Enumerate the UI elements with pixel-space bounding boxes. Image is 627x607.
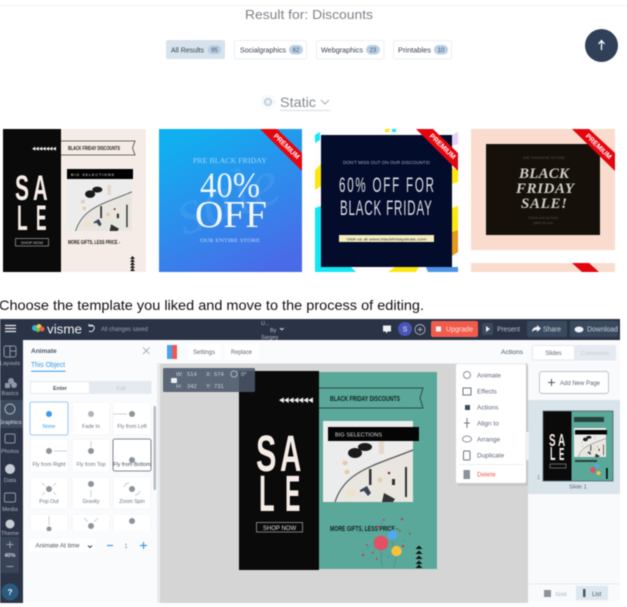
option: fade in: Fade In: [82, 424, 100, 430]
sale lettering: [256, 425, 301, 523]
premium ribbon: [260, 129, 302, 171]
design on canvas: ◀◀◀◀◀◀◀: [279, 396, 314, 404]
template card: 40% off: sale: [164, 145, 289, 250]
transform info box: 0°: [241, 372, 247, 378]
sidebar: theme: [1, 520, 19, 537]
transform info box: [163, 368, 255, 392]
tab: this object: This Object: [31, 362, 65, 369]
actions context menu: [456, 364, 528, 486]
transform info box: 574: [214, 372, 224, 378]
shop now button: [16, 238, 48, 246]
slide 1 thumbnail: L: [550, 445, 556, 465]
sidebar: layouts: Layouts: [0, 361, 20, 367]
help button: ?: [7, 587, 13, 597]
colour swatch: [167, 345, 177, 359]
slide 1 thumbnail: Slide 1: [569, 484, 587, 490]
design on canvas: [239, 371, 437, 570]
slide 1 thumbnail: E: [559, 443, 564, 464]
website strip: [339, 235, 434, 242]
transform info box: 342: [187, 384, 197, 390]
panel title: [31, 348, 150, 355]
help button: [2, 584, 18, 600]
menu: delete: Delete: [477, 472, 496, 478]
option: zoom spin: Zoom Spin: [119, 499, 145, 505]
menu: actions: Actions: [477, 404, 499, 412]
settings button: Settings: [193, 349, 216, 356]
left sidebar: [0, 340, 23, 603]
project title: U...: [261, 321, 270, 327]
icon: chat: [383, 326, 391, 334]
slide 1 thumbnail: S: [549, 431, 556, 451]
top bar: [0, 319, 620, 341]
ribbon headline: [319, 388, 423, 408]
sale lettering: S: [256, 425, 276, 482]
template card: 60% off: 60% OFF FOR: [339, 173, 434, 197]
menu: animate: Animate: [477, 372, 501, 380]
transform info box: H:: [176, 384, 182, 390]
pill: webgraphics: 23: [370, 48, 377, 54]
tabs: slides comments: Comments: [581, 351, 609, 357]
sidebar: basics: Basics: [1, 391, 19, 397]
avatar: [398, 322, 412, 336]
option: fly from right: Fly from Right: [33, 462, 66, 468]
icon: static: [262, 96, 274, 108]
add new page button: Add New Page: [560, 380, 600, 387]
add collaborator: [415, 324, 425, 334]
ribbon headline: BLACK FRIDAY DISCOUNTS: [68, 146, 120, 152]
tabs: slides comments: Slides: [545, 351, 562, 357]
visme logo: visme: [47, 322, 82, 336]
template card: 60% off: DON'T MISS OUT ON OUR DISCOUNTS!: [343, 160, 430, 165]
editor screenshot: [0, 319, 620, 603]
sale lettering: S: [15, 170, 29, 208]
download button: [570, 321, 618, 337]
pill: printables: Printables: [398, 46, 431, 54]
template card: 40% off: [159, 129, 302, 272]
add new page button: [540, 372, 608, 394]
template card: 60% off: BLACK FRIDAY: [340, 196, 432, 220]
premium ribbon: PREMIUM: [272, 133, 300, 161]
pill: printables: 10: [438, 48, 445, 54]
pill: socialgraphics: Socialgraphics: [240, 46, 286, 54]
pill: socialgraphics: 62: [293, 48, 300, 54]
premium ribbon: PREMIUM: [584, 133, 612, 161]
template card: 40% off: 40%: [200, 165, 260, 205]
top bar: All changes saved: [101, 326, 148, 333]
animate timing control: [30, 539, 147, 552]
option: none: None: [43, 424, 55, 430]
heading: result for discounts: Result for: Discounts: [245, 7, 374, 22]
option: fly from bottom: Fly from Bottom: [113, 462, 151, 468]
premium ribbon: [572, 129, 615, 171]
top divider: [0, 5, 627, 6]
project title: By: [270, 328, 277, 334]
shop now button: SHOP NOW: [263, 526, 296, 532]
template card: black friday sale italic: [471, 129, 615, 250]
shop now button: SHOP NOW: [21, 240, 43, 245]
transform info box: 514: [187, 372, 197, 378]
static dropdown: Static: [280, 94, 316, 110]
filter pills: [166, 40, 452, 59]
premium ribbon: PREMIUM: [428, 133, 456, 161]
enter exit toggle: [30, 381, 152, 394]
template card: cropped next row: [471, 263, 615, 272]
transform info box: 731: [214, 384, 224, 390]
options row cut off: [28, 514, 154, 534]
upgrade button: Upgrade: [446, 326, 473, 334]
sale lettering: A: [33, 169, 48, 209]
ribbon headline: BLACK FRIDAY DISCOUNTS: [330, 394, 400, 403]
pill: socialgraphics: [234, 40, 306, 59]
collapse handle: [525, 432, 529, 460]
sale lettering: E: [285, 466, 300, 523]
pill: all results: [166, 40, 225, 59]
right slides panel: [525, 340, 620, 603]
template card: black friday sale italic: BLACK: [518, 166, 570, 182]
slide 1 thumbnail: [528, 400, 620, 494]
template card: 40% off: OUR ENTIRE STORE: [200, 238, 261, 244]
replace button: [225, 344, 259, 360]
upgrade button: [431, 321, 478, 337]
template card: 40% off: PRE BLACK FRIDAY: [193, 156, 268, 165]
menu: duplicate: Duplicate: [477, 452, 504, 460]
editor toolbar: Actions: [501, 349, 524, 356]
sidebar: media: [2, 493, 19, 513]
sidebar: basics: [1, 378, 19, 397]
menu: effects: Effects: [477, 388, 498, 396]
tabs: slides comments: [532, 345, 616, 360]
photo block: [323, 421, 419, 502]
animate timing control: Animate At time: [36, 542, 80, 550]
enter exit toggle: Exit: [116, 386, 126, 392]
grid list view switch: Grid: [556, 592, 566, 598]
slide 1 thumbnail: A: [558, 431, 565, 451]
option: pop out: Pop Out: [39, 499, 59, 505]
pill: printables: [394, 40, 452, 59]
sidebar: theme: Theme: [1, 531, 19, 537]
sale lettering: L: [259, 465, 275, 522]
pill: all results: 95: [211, 48, 218, 54]
visme logo: [32, 322, 82, 336]
photo block: BIG SELECTIONS: [71, 173, 115, 177]
sidebar: photos: Photos: [1, 449, 19, 455]
ribbon headline: [61, 141, 135, 155]
template card: 40% off: OFF: [195, 194, 267, 236]
sale lettering: [15, 169, 48, 238]
panel scrollbar: [154, 406, 156, 490]
sidebar: layouts: [0, 346, 20, 367]
download button: Download: [587, 326, 618, 334]
replace button: Replace: [231, 349, 252, 356]
template card: 60% off: [315, 129, 458, 272]
premium ribbon: [416, 129, 458, 171]
slide 1 thumbnail: 1: [537, 475, 540, 481]
template card: black friday sale italic: sales for you: [533, 221, 553, 225]
transform info box: Y:: [206, 384, 212, 390]
menu: arrange: Arrange: [477, 436, 501, 444]
grid list view switch: [528, 584, 620, 600]
project title: Sargey: [261, 335, 279, 341]
template card: black friday sale italic: FRIDAY: [515, 181, 576, 197]
share button: [527, 321, 567, 337]
template card: black friday sale italic: SALE!: [521, 196, 567, 212]
sidebar: data: Data: [4, 478, 17, 484]
avatar: S: [403, 326, 408, 334]
template card: black friday sale: MORE GIFTS, LESS PRICE -: [68, 240, 120, 246]
design on canvas: MORE GIFTS, LESS PRICE -: [330, 526, 398, 533]
pill: webgraphics: [316, 40, 384, 59]
present button: [482, 323, 520, 335]
sale lettering: L: [17, 198, 28, 238]
present button: Present: [497, 326, 520, 334]
settings button: [187, 344, 221, 360]
sidebar: photos: [1, 434, 19, 455]
canvas background: [160, 363, 528, 603]
animate timing control: 1: [124, 544, 128, 550]
zoom control: 40%: [4, 553, 16, 559]
static dropdown: [262, 94, 330, 110]
option: fly from left: Fly from Left: [117, 424, 147, 430]
sidebar: data: [4, 464, 17, 484]
option: gravity: Gravity: [83, 499, 100, 505]
photo block: BIG SELECTIONS: [335, 432, 382, 438]
template card: black friday sale italic: WE FASHION STORE: [523, 156, 566, 160]
balloons: [362, 518, 410, 567]
paint splashes: [315, 129, 458, 272]
menu: align to: Align to: [477, 420, 499, 428]
pill: webgraphics: Webgraphics: [321, 46, 363, 54]
panel title: Animate: [31, 348, 57, 355]
option: fly from top: Fly from Top: [76, 462, 106, 468]
sidebar: graphics: [0, 404, 22, 426]
instruction text: Choose the template you liked and move to the process of editing.: [0, 297, 424, 313]
sidebar: media: Media: [2, 507, 19, 513]
enter exit toggle: Enter: [53, 386, 68, 392]
grid list view switch: List: [592, 592, 602, 598]
photo block: [67, 169, 133, 231]
back to top button: [585, 29, 618, 62]
template card: black friday sale: ◀◀◀◀◀◀◀: [32, 146, 56, 152]
animation option grid: [28, 402, 154, 534]
transform info box: X:: [206, 372, 212, 378]
zoom control: [1, 537, 19, 573]
animate panel: [23, 340, 160, 603]
transform info box: W:: [176, 372, 183, 378]
project title: [261, 321, 284, 341]
template card: black friday sale italic: Check out our best: [528, 216, 558, 220]
pill: all results: All Results: [171, 46, 204, 54]
icon: menu: [5, 326, 16, 332]
template card: black friday sale: [3, 129, 146, 272]
share button: Share: [543, 326, 561, 334]
editor toolbar: [160, 340, 528, 364]
website strip: Visit us at www.blackfridaydeals.com: [346, 236, 427, 242]
sale lettering: E: [36, 198, 47, 238]
sale lettering: A: [280, 425, 301, 482]
shop now button: [256, 522, 302, 532]
